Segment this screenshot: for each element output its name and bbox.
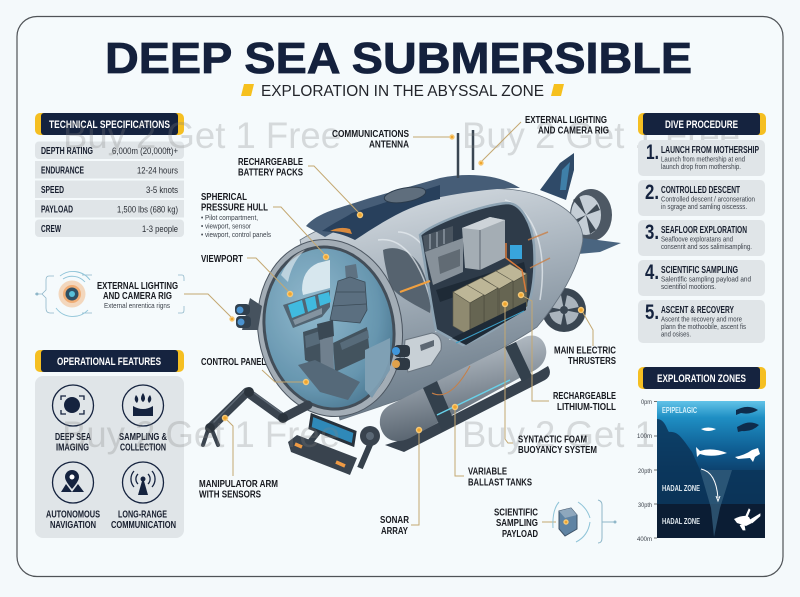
keyboard strip (293, 308, 322, 325)
label: scientific sampling payload: SCIENTIFIC (494, 508, 538, 518)
feature: autonomous navigation (46, 462, 100, 531)
label: external lighting and camera rig: EXTERNAL LIGHTING (525, 115, 607, 126)
lower rear thruster (542, 288, 586, 332)
label: spherical pressure hull: SPHERICAL (201, 192, 247, 203)
depth axis: 100m (637, 433, 652, 440)
heading: dive procedure (638, 113, 766, 135)
label: rechargeable battery packs: RECHARGEABLE (238, 157, 303, 168)
row: crew: 1-3 people (142, 224, 178, 235)
title: DEEP SEA SUBMERSIBLE (105, 34, 692, 83)
top rear thruster (570, 189, 612, 241)
row: depth rating (35, 142, 184, 159)
depth axis: 0pm (641, 399, 652, 406)
callout: external lighting and camera rig: AND CAMERA RIG (103, 291, 172, 302)
pilot seat (330, 264, 367, 323)
label: rechargeable lithium-tioll: RECHARGEABLE (553, 391, 616, 402)
hull (300, 188, 583, 420)
step 2 (638, 180, 765, 216)
subtitle: EXPLORATION IN THE ABYSSAL ZONE (261, 83, 544, 100)
floor (298, 360, 360, 400)
central console (317, 320, 334, 375)
label: rechargeable battery packs: BATTERY PACKS (238, 168, 303, 178)
step 1: LAUNCH FROM MOTHERSHIP (661, 145, 759, 156)
label: external lighting and camera rig: AND CAMERA RIG (538, 126, 609, 136)
icon: sample cube (553, 500, 616, 543)
row: depth rating: DEPTH RATING (41, 146, 93, 157)
feature: sampling and collection: COLLECTION (120, 442, 166, 454)
screens (288, 292, 331, 318)
row: endurance (35, 161, 184, 178)
row: depth rating: 6,000m (20,000ft)+ (112, 146, 178, 157)
step 2: Controlled descent / arconseration (661, 196, 755, 204)
label: rechargeable lithium-tioll: LITHIUM-TIOLL (557, 402, 616, 413)
label: main electric thrusters: MAIN ELECTRIC (554, 346, 616, 356)
step 5: Ascent the recovery and more (661, 316, 742, 324)
diver (734, 509, 760, 530)
watermark text: Buy 2 Get 1 Free (462, 115, 740, 156)
step 2: CONTROLLED DESCENT (661, 185, 740, 196)
depth axis (637, 399, 657, 543)
watermark text: Buy 2 Get 1 Free (62, 414, 340, 455)
battery packs (453, 264, 527, 336)
feature: autonomous navigation: NAVIGATION (50, 520, 96, 531)
label: scientific sampling payload: SAMPLING (496, 518, 538, 529)
step 2: in sgrage and samling oiscesss. (661, 204, 747, 211)
panel: exploration zones (637, 367, 766, 543)
step 1: 1. (646, 141, 659, 164)
depth chart: HADAL ZONE (662, 516, 700, 526)
row: payload: PAYLOAD (41, 204, 73, 216)
label: spherical pressure hull: • Pilot compartment, (201, 215, 258, 222)
row: speed: 3-5 knots (146, 185, 178, 196)
heading: operational features (35, 350, 184, 372)
dome interior (253, 238, 405, 418)
row: payload: 1,500 lbs (680 kg) (117, 204, 178, 216)
feature: long-range communication: LONG-RANGE (118, 510, 167, 520)
label: syntactic foam buoyancy system (502, 302, 597, 456)
watermark text: Buy 2 Get 1 Free (63, 115, 341, 156)
step 3: SEAFLOOR EXPLORATION (661, 225, 747, 236)
step 2: 2. (645, 181, 659, 204)
translucent bands (378, 200, 542, 340)
step 5: 5. (645, 301, 659, 324)
row: endurance: ENDURANCE (41, 166, 84, 176)
feature: sampling and collection: SAMPLING & (119, 432, 167, 443)
heading: dive procedure: DIVE PROCEDURE (665, 119, 738, 131)
label: main electric thrusters (554, 308, 616, 367)
callout: external lighting and camera rig (35, 271, 234, 321)
heading: technical specifications (35, 113, 184, 135)
grey module (462, 217, 505, 270)
label: manipulator arm with sensors: WITH SENSORS (199, 490, 261, 500)
label: communications antenna: ANTENNA (369, 140, 409, 150)
tail fin (540, 153, 574, 200)
depth axis: 400m (637, 536, 652, 543)
shelf (436, 262, 526, 302)
row: payload (35, 200, 184, 218)
sonar array (288, 415, 380, 475)
illustration: submersible (203, 130, 621, 475)
row: crew: CREW (41, 224, 61, 235)
step 3: 3. (645, 221, 659, 244)
panel: dive procedure (638, 113, 766, 343)
label: communications antenna: COMMUNICATIONS (332, 129, 409, 140)
step 5: plann the mothoobile, ascent fis (661, 324, 746, 331)
antennas (458, 130, 473, 178)
rear window (302, 260, 330, 295)
label: external lighting and camera rig (479, 115, 609, 165)
step 4 (638, 260, 765, 296)
label: variable ballast tanks (452, 404, 532, 488)
label: control panel (201, 357, 308, 384)
right camera pod (392, 333, 441, 372)
label: syntactic foam buoyancy system: BUOYANCY SYSTEM (518, 445, 597, 456)
cutaway interior (420, 203, 535, 345)
top deck (306, 175, 520, 240)
heading: exploration zones: EXPLORATION ZONES (657, 373, 746, 385)
marine life (696, 407, 760, 462)
label: spherical pressure hull: • viewport, sensor (201, 224, 252, 230)
row: endurance: 12-24 hours (137, 166, 178, 176)
feature: deep sea imaging: IMAGING (56, 442, 89, 454)
depth chart: EPIPELAGIC (662, 405, 697, 415)
label: scientific sampling payload (494, 500, 616, 543)
label: variable ballast tanks: VARIABLE (468, 466, 507, 478)
manipulator arm (203, 387, 308, 445)
label: sonar array (380, 428, 422, 537)
label: scientific sampling payload: PAYLOAD (502, 529, 538, 540)
label: manipulator arm with sensors: MANIPULATOR ARM (199, 479, 278, 490)
step 4: 4. (645, 261, 659, 284)
feature: long-range communication (111, 462, 176, 531)
label: control panel: CONTROL PANEL (201, 357, 266, 368)
label: rechargeable battery packs (238, 157, 362, 218)
step 4: SCIENTIFIC SAMPLING (661, 265, 738, 276)
feature: long-range communication: COMMUNICATION (111, 520, 176, 531)
control console (283, 290, 330, 328)
label: main electric thrusters: THRUSTERS (568, 356, 616, 367)
feature: deep sea imaging (52, 385, 94, 454)
wiring and display (506, 243, 526, 292)
panel: operational features (35, 350, 184, 538)
label: sonar array: SONAR (380, 515, 409, 526)
step 5: ASCENT & RECOVERY (661, 305, 734, 316)
label: sonar array: ARRAY (381, 526, 408, 537)
step 1: launch drop from mothership. (661, 164, 741, 171)
label: viewport (201, 254, 292, 296)
step 3: Seafloove exploratans and (661, 236, 733, 244)
label: manipulator arm with sensors (199, 416, 278, 500)
descent arrow (701, 469, 720, 501)
depth axis: 30pth (638, 502, 652, 509)
left camera pod (235, 298, 262, 330)
row: crew (35, 220, 184, 237)
depth chart: HADAL ZONE (662, 483, 700, 493)
depth axis: 20pth (638, 468, 652, 475)
rear accent lines (528, 232, 550, 268)
orange glow (400, 281, 430, 292)
feature: autonomous navigation: AUTONOMOUS (46, 510, 100, 520)
icon: camera light (36, 271, 90, 316)
callout: external lighting and camera rig: EXTERNAL LIGHTING (97, 281, 178, 292)
watermark text (62, 115, 740, 455)
step 4: Salentlfic sampling payload and (661, 276, 751, 284)
step 5 (638, 300, 765, 343)
callout: external lighting and camera rig: External enrentica rigns (104, 303, 170, 310)
label: rechargeable lithium-tioll (518, 292, 616, 413)
label: spherical pressure hull: PRESSURE HULL (201, 202, 268, 214)
lower fin (573, 238, 621, 254)
step 1 (638, 140, 765, 176)
label: spherical pressure hull (201, 192, 328, 260)
watermark text: Buy 2 Get 1 Free (462, 414, 740, 455)
label: spherical pressure hull: • viewport, control panels (201, 232, 271, 239)
row: speed (35, 180, 184, 198)
step 5: and osises. (661, 332, 691, 338)
heading: operational features: OPERATIONAL FEATURES (57, 356, 161, 368)
step 3 (638, 220, 765, 256)
dome inner ring (250, 235, 408, 421)
seat base (303, 326, 370, 372)
ballast tanks (380, 336, 550, 452)
label: viewport: VIEWPORT (201, 254, 243, 265)
trench (700, 470, 732, 537)
label: communications antenna (332, 129, 454, 150)
step 4: scientifiol mootions. (661, 284, 716, 291)
translucent hull window (383, 248, 431, 313)
heading: exploration zones (638, 367, 766, 389)
machinery (423, 226, 463, 285)
row: speed: SPEED (41, 185, 64, 196)
step 3: consenrit and sos salimisampling. (661, 244, 752, 251)
glass sheen (253, 238, 405, 418)
right frame (365, 338, 390, 398)
dome ring (244, 228, 416, 428)
step 1: Launch from methership at end (661, 156, 745, 164)
depth chart (657, 401, 765, 538)
feature: sampling and collection (119, 385, 167, 454)
feature: deep sea imaging: DEEP SEA (55, 432, 91, 443)
label: variable ballast tanks: BALLAST TANKS (468, 478, 532, 488)
label: syntactic foam buoyancy system: SYNTACTIC FOAM (518, 434, 587, 446)
heading: technical specifications: TECHNICAL SPECIFICATIONS (49, 119, 170, 131)
panel: technical specifications (35, 113, 184, 237)
